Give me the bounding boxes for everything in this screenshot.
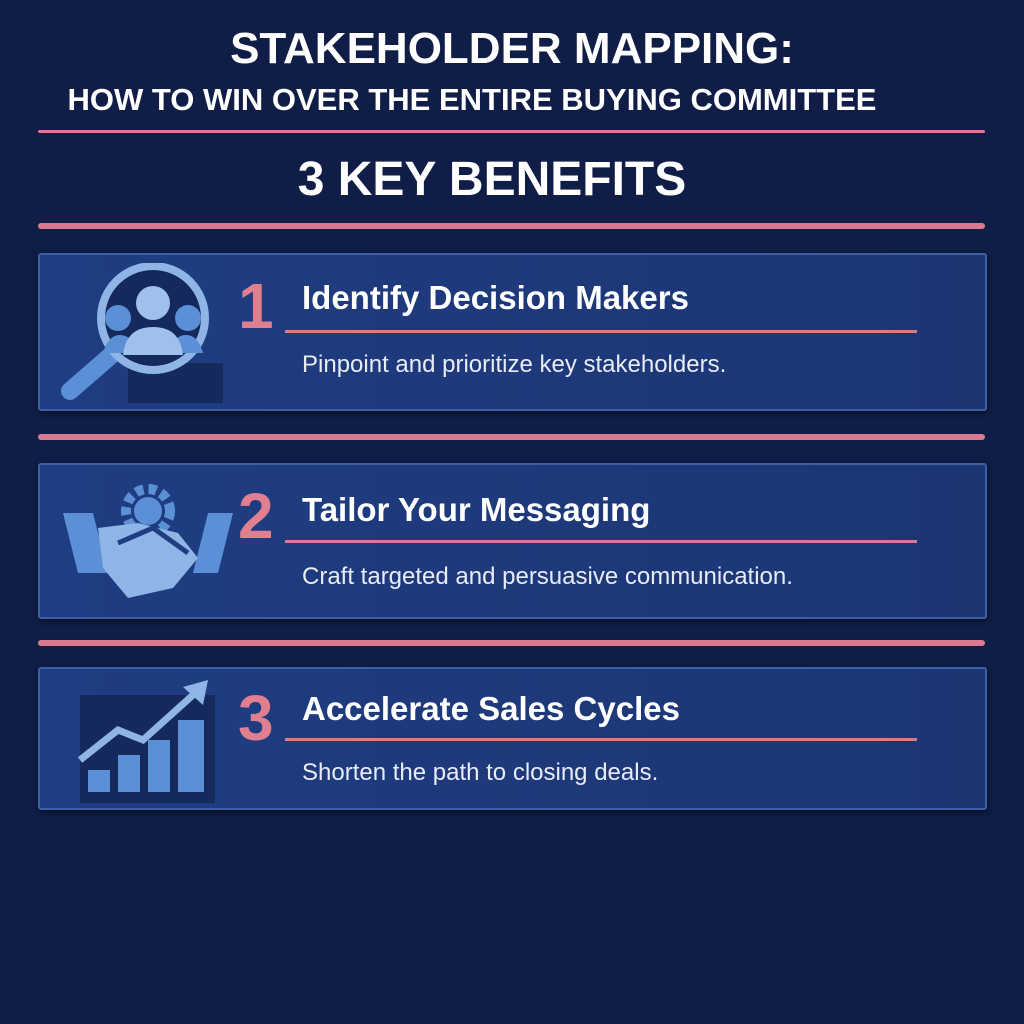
panel: benefit 2 (38, 463, 987, 619)
panel: benefit 1 (38, 253, 987, 411)
title: STAKEHOLDER MAPPING: (230, 24, 794, 73)
heading: Identify Decision Makers (302, 279, 689, 316)
description: Shorten the path to closing deals. (302, 759, 658, 786)
heading: Accelerate Sales Cycles (302, 690, 680, 727)
icon: handshake gear (63, 484, 233, 598)
description: Pinpoint and prioritize key stakeholders. (302, 351, 726, 378)
section heading: 3 KEY BENEFITS (298, 153, 686, 206)
icon: magnifier people (61, 263, 223, 403)
heading: Tailor Your Messaging (302, 491, 650, 528)
icon: growth chart (78, 680, 215, 803)
number 2: 2 (238, 480, 274, 552)
description: Craft targeted and persuasive communication. (302, 563, 793, 590)
number 3: 3 (238, 682, 274, 754)
panel: benefit 3 (38, 667, 987, 810)
number 1: 1 (238, 270, 274, 342)
subtitle: HOW TO WIN OVER THE ENTIRE BUYING COMMITTEE (68, 82, 876, 117)
